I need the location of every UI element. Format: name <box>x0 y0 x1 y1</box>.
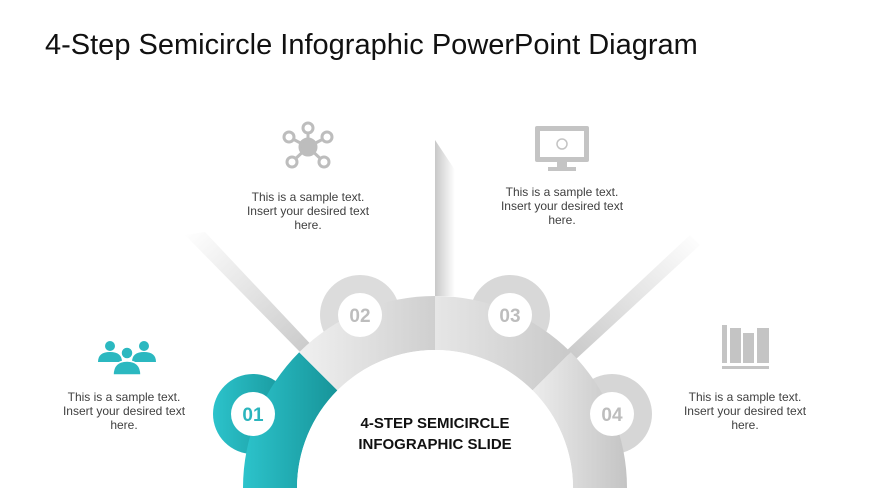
icon: books <box>722 325 769 369</box>
number badges <box>231 293 634 436</box>
text 02: This is a sample text. Insert your desired text here. <box>247 190 369 232</box>
icon: monitor <box>535 126 589 171</box>
number badges: 01 <box>242 405 264 426</box>
number badges: 03 <box>499 306 521 327</box>
icon: people <box>98 341 156 375</box>
inner white circle <box>297 350 573 489</box>
segment 02 <box>299 275 435 390</box>
shadow beams <box>185 140 700 360</box>
segment 03 <box>435 275 571 390</box>
segment 01 <box>213 352 337 488</box>
number badges: 04 <box>601 405 623 426</box>
text 03: This is a sample text. Insert your desired text here. <box>501 185 623 227</box>
title: 4-Step Semicircle Infographic PowerPoint Diagram <box>45 29 698 61</box>
center label: INFOGRAPHIC SLIDE <box>358 436 512 453</box>
segment 04 <box>533 352 652 488</box>
center label <box>358 415 512 453</box>
text 04: This is a sample text. Insert your desired text here. <box>684 390 806 432</box>
number badges: 02 <box>349 306 371 327</box>
text 01: This is a sample text. Insert your desired text here. <box>63 390 185 432</box>
center label: 4-STEP SEMICIRCLE <box>361 415 509 432</box>
icon: network <box>284 123 332 167</box>
